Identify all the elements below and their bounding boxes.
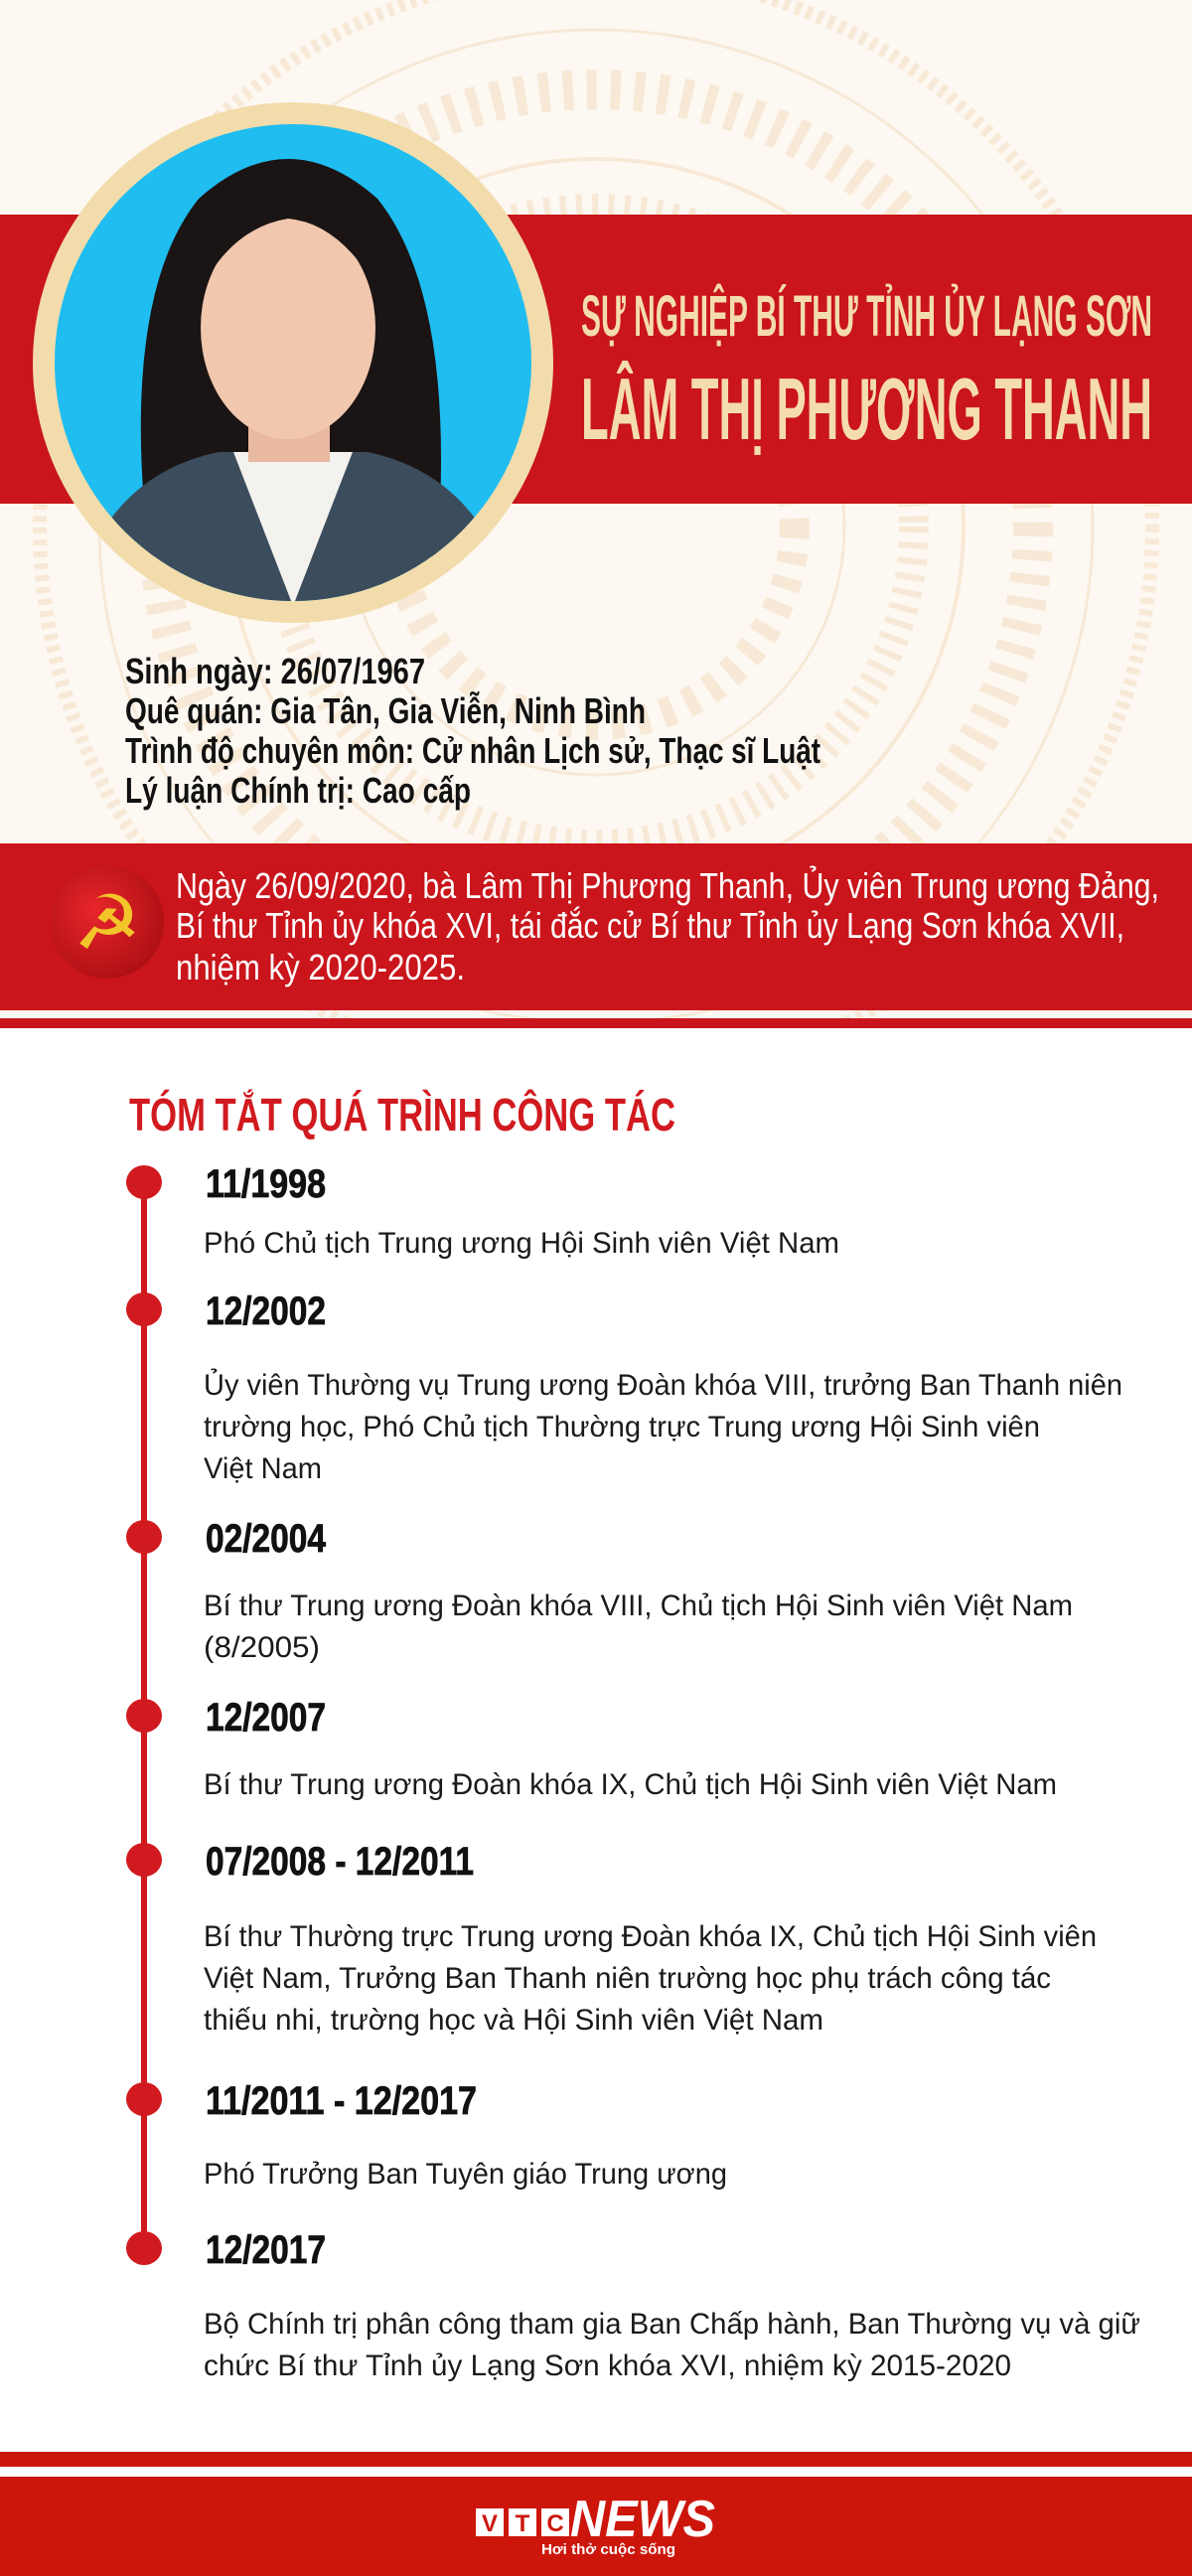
timeline descriptions: (8/2005) xyxy=(204,1631,320,1664)
logo: VTC NEWS: NEWS xyxy=(570,2491,715,2548)
timeline descriptions: trường học, Phó Chủ tịch Thường trực Trung ương Hội Sinh viên xyxy=(204,1411,1040,1443)
timeline descriptions: Bí thư Trung ương Đoàn khóa IX, Chủ tịch Hội Sinh viên Việt Nam xyxy=(204,1768,1057,1801)
timeline descriptions: Phó Chủ tịch Trung ương Hội Sinh viên Việt Nam xyxy=(204,1227,839,1260)
background header area xyxy=(0,0,1192,1083)
portrait photo xyxy=(33,102,553,623)
timeline dates: 02/2004 xyxy=(206,1517,327,1561)
announcement text: nhiệm kỳ 2020-2025. xyxy=(176,947,465,987)
timeline descriptions: Ủy viên Thường vụ Trung ương Đoàn khóa VIII, trưởng Ban Thanh niên xyxy=(204,1368,1122,1402)
red title banner xyxy=(0,215,1192,504)
timeline descriptions: thiếu nhi, trường học và Hội Sinh viên Việt Nam xyxy=(204,2004,823,2037)
timeline dates: 11/2011 - 12/2017 xyxy=(206,2079,477,2123)
timeline descriptions: Bí thư Thường trực Trung ương Đoàn khóa IX, Chủ tịch Hội Sinh viên xyxy=(204,1920,1097,1953)
logo: VTC NEWS: T xyxy=(516,2510,530,2537)
icon: party flag xyxy=(51,865,164,979)
announcement text xyxy=(176,864,1159,987)
timeline dates: 12/2017 xyxy=(206,2228,326,2272)
timeline descriptions: Phó Trưởng Ban Tuyên giáo Trung ương xyxy=(204,2158,727,2191)
icon: party flag: ☭ xyxy=(74,878,141,967)
personal info xyxy=(125,651,820,811)
timeline descriptions xyxy=(204,1227,1140,2382)
timeline descriptions: Bộ Chính trị phân công tham gia Ban Chấp hành, Ban Thường vụ và giữ xyxy=(204,2308,1140,2341)
logo: VTC NEWS: Hơi thở cuộc sống xyxy=(541,2541,675,2558)
timeline dates: 12/2002 xyxy=(206,1289,326,1333)
footer xyxy=(0,2452,1192,2576)
personal info: Quê quán: Gia Tân, Gia Viễn, Ninh Bình xyxy=(125,690,646,731)
timeline dates: 07/2008 - 12/2011 xyxy=(206,1840,474,1884)
personal info: Trình độ chuyên môn: Cử nhân Lịch sử, Thạc sĩ Luật xyxy=(125,730,820,771)
timeline descriptions: Việt Nam xyxy=(204,1452,322,1485)
personal info: Lý luận Chính trị: Cao cấp xyxy=(125,770,471,811)
red announcement band xyxy=(0,843,1192,1028)
timeline xyxy=(126,1162,1140,2382)
timeline dates: 12/2007 xyxy=(206,1696,326,1740)
personal info: Sinh ngày: 26/07/1967 xyxy=(125,651,425,691)
title xyxy=(581,284,1152,458)
timeline descriptions: Bí thư Trung ương Đoàn khóa VIII, Chủ tịch Hội Sinh viên Việt Nam xyxy=(204,1590,1073,1622)
section heading: TÓM TẮT QUÁ TRÌNH CÔNG TÁC xyxy=(129,1089,675,1140)
timeline dates: 11/1998 xyxy=(206,1162,326,1206)
logo: VTC NEWS: C xyxy=(546,2510,564,2537)
timeline dates xyxy=(206,1162,477,2272)
logo: VTC NEWS xyxy=(476,2491,715,2558)
timeline descriptions: chức Bí thư Tỉnh ủy Lạng Sơn khóa XVI, nhiệm kỳ 2015-2020 xyxy=(204,2349,1011,2382)
timeline descriptions: Việt Nam, Trưởng Ban Thanh niên trường học phụ trách công tác xyxy=(204,1962,1051,1995)
logo: VTC NEWS: V xyxy=(482,2510,498,2537)
